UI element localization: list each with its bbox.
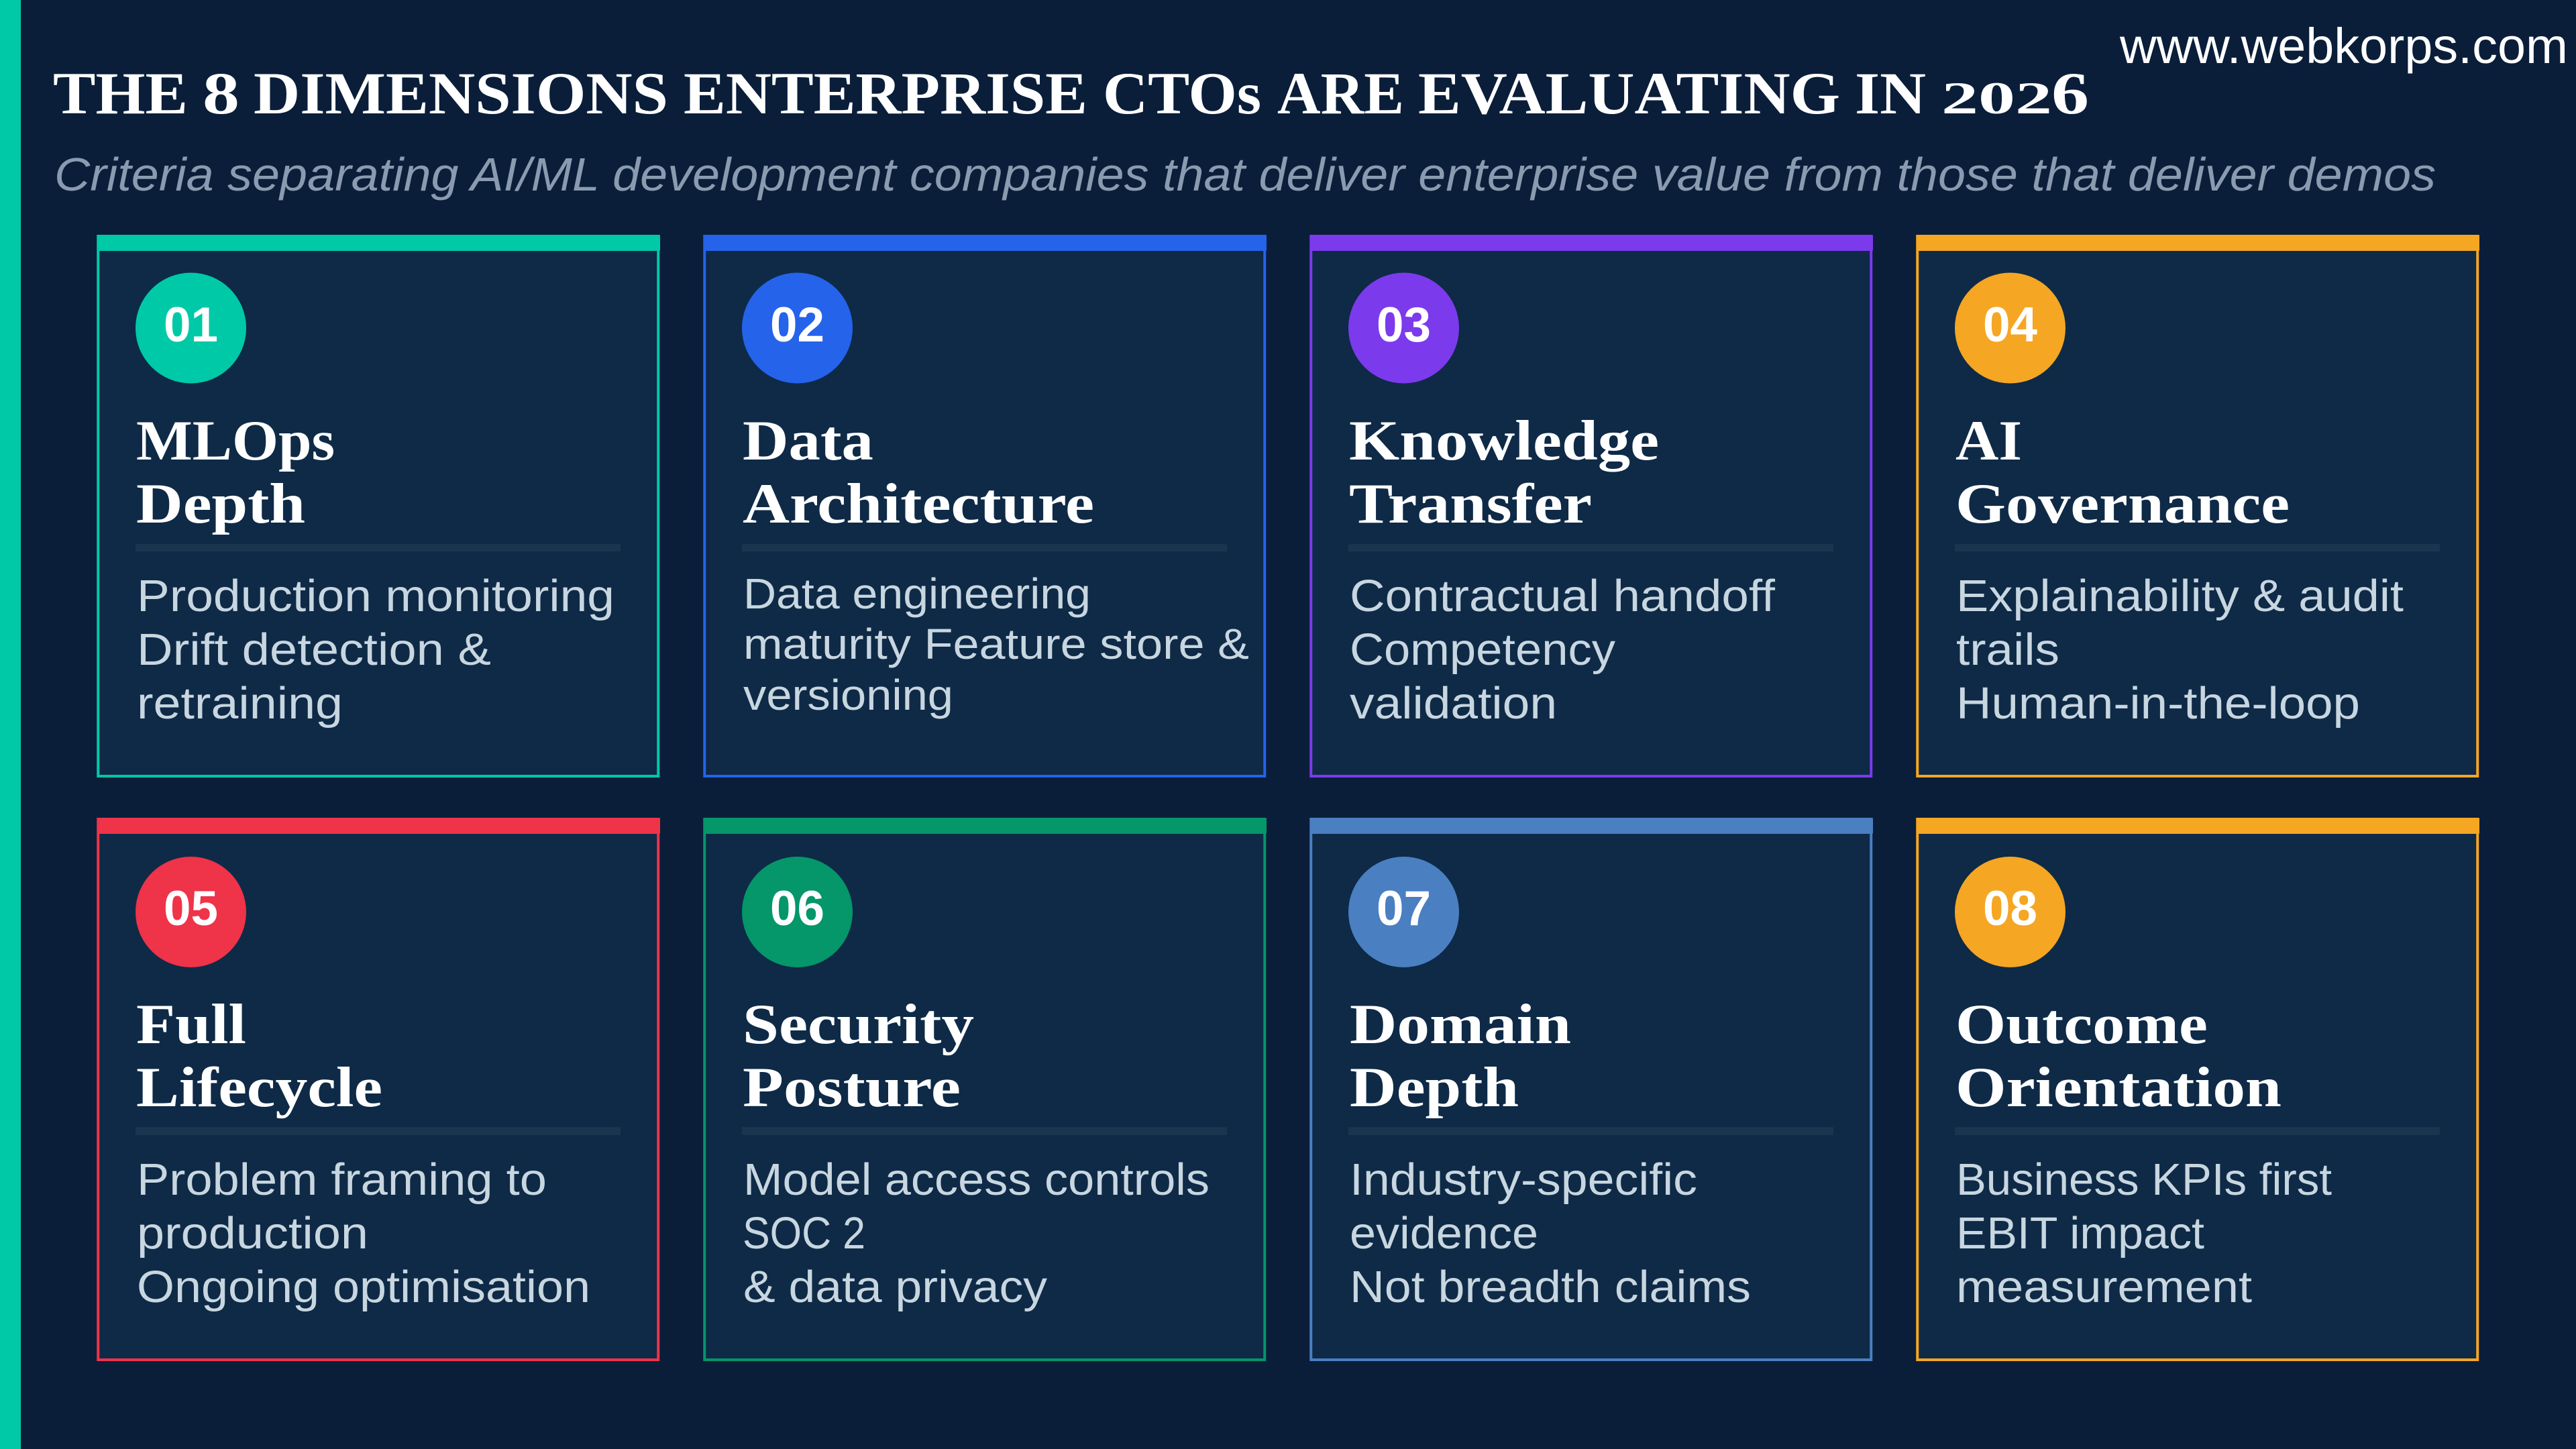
heading [743, 409, 1094, 535]
heading [1955, 409, 2290, 535]
heading: Data [743, 409, 873, 472]
description: & data privacy [743, 1262, 1048, 1312]
card frame [1311, 236, 1871, 776]
heading: Depth [136, 472, 305, 535]
description: SOC 2 [743, 1208, 865, 1258]
heading: Security [743, 993, 974, 1056]
number badge 03: 03 [1377, 298, 1431, 352]
card top bar [1309, 235, 1873, 251]
heading: Governance [1955, 472, 2290, 535]
description: Competency [1350, 625, 1616, 675]
title: 6 [2051, 61, 2089, 127]
description: versioning [743, 671, 953, 719]
panel: 07 Domain Depth [1309, 818, 1873, 1360]
number badge 03 [1348, 272, 1459, 384]
number badge 08 [1955, 857, 2065, 967]
description: Business KPIs first [1956, 1155, 2332, 1205]
title: ARE [1277, 61, 1404, 127]
heading [1955, 993, 2282, 1119]
description [137, 571, 614, 729]
number badge 06: 06 [770, 881, 824, 936]
description: Industry-specific [1350, 1155, 1697, 1205]
heading: Architecture [743, 472, 1094, 535]
panel: 06 Security Posture [703, 818, 1267, 1360]
heading: Outcome [1955, 993, 2208, 1056]
panel: 04 AI Governance [1916, 235, 2479, 776]
left accent bar [0, 0, 21, 1449]
description [1956, 571, 2404, 729]
title: THE [53, 61, 188, 127]
number badge 01: 01 [164, 298, 218, 352]
title: 202 [1941, 72, 2052, 123]
heading: Knowledge [1349, 409, 1659, 472]
heading: Transfer [1349, 472, 1592, 535]
card frame [704, 236, 1265, 776]
card frame [98, 236, 658, 776]
description: Contractual handoff [1350, 571, 1775, 621]
number badge 01 [136, 272, 246, 384]
number badge 07: 07 [1377, 881, 1431, 936]
heading: Depth [1350, 1056, 1519, 1119]
description: EBIT impact [1956, 1208, 2204, 1258]
card frame [1917, 236, 2477, 776]
description [1350, 571, 1775, 729]
number badge 08: 08 [1983, 881, 2037, 936]
card top bar [703, 818, 1267, 834]
number badge 04 [1955, 272, 2065, 384]
description: Human-in-the-loop [1956, 678, 2360, 729]
heading: Lifecycle [136, 1056, 382, 1119]
number badge 07 [1348, 857, 1459, 967]
description: Drift detection & [137, 625, 491, 675]
panel: 05 Full Lifecycle [97, 818, 660, 1360]
description [743, 1155, 1210, 1312]
heading: Full [136, 993, 246, 1056]
heading: MLOps [136, 409, 335, 472]
subtitle: Criteria separating AI/ML development companies that deliver enterprise value from those that deliver demos [54, 148, 2436, 201]
title [53, 61, 2089, 127]
card top bar [1916, 235, 2479, 251]
title: ENTERPRISE [684, 61, 1087, 127]
number badge 04: 04 [1983, 298, 2037, 352]
heading [1349, 409, 1659, 535]
panel: 01 MLOps Depth [97, 235, 660, 776]
card top bar [97, 818, 660, 834]
description: Ongoing optimisation [137, 1262, 590, 1312]
number badge 05 [136, 857, 246, 967]
heading [136, 993, 382, 1119]
description: measurement [1956, 1262, 2252, 1312]
heading: Posture [743, 1056, 961, 1119]
card frame [98, 819, 658, 1360]
heading: AI [1955, 409, 2022, 472]
description [743, 570, 1249, 719]
number badge 05: 05 [164, 881, 218, 936]
number badge 06 [742, 857, 853, 967]
title: IN [1855, 61, 1926, 127]
number badge 02: 02 [770, 298, 824, 352]
website url: www.webkorps.com [2119, 18, 2568, 74]
description: Model access controls [743, 1155, 1210, 1205]
description: retraining [137, 678, 343, 729]
description: maturity Feature store & [743, 620, 1249, 668]
description [1956, 1155, 2332, 1312]
card frame [1311, 819, 1871, 1360]
description [1350, 1155, 1751, 1312]
number badge 02 [742, 272, 853, 384]
card top bar [1916, 818, 2479, 834]
title: 8 [203, 61, 239, 127]
panel: 02 Data Architecture [703, 235, 1267, 776]
heading [1350, 993, 1571, 1119]
description: Explainability & audit [1956, 571, 2404, 621]
title: DIMENSIONS [254, 61, 668, 127]
heading: Orientation [1955, 1056, 2282, 1119]
description: Production monitoring [137, 571, 614, 621]
description: Problem framing to [137, 1155, 547, 1205]
card top bar [97, 235, 660, 251]
heading: Domain [1350, 993, 1571, 1056]
heading [136, 409, 335, 535]
description: validation [1350, 678, 1557, 729]
panel: 08 Outcome Orientation [1916, 818, 2479, 1360]
heading [743, 993, 974, 1119]
card top bar [1309, 818, 1873, 834]
description: Not breadth claims [1350, 1262, 1751, 1312]
title: CTOs [1103, 61, 1261, 127]
card frame [704, 819, 1265, 1360]
card frame [1917, 819, 2477, 1360]
description: trails [1956, 625, 2059, 675]
title: EVALUATING [1418, 61, 1840, 127]
description: production [137, 1208, 368, 1258]
panel: 03 Knowledge Transfer [1309, 235, 1873, 776]
card top bar [703, 235, 1267, 251]
description: evidence [1350, 1208, 1538, 1258]
description [137, 1155, 590, 1312]
description: Data engineering [743, 570, 1091, 618]
